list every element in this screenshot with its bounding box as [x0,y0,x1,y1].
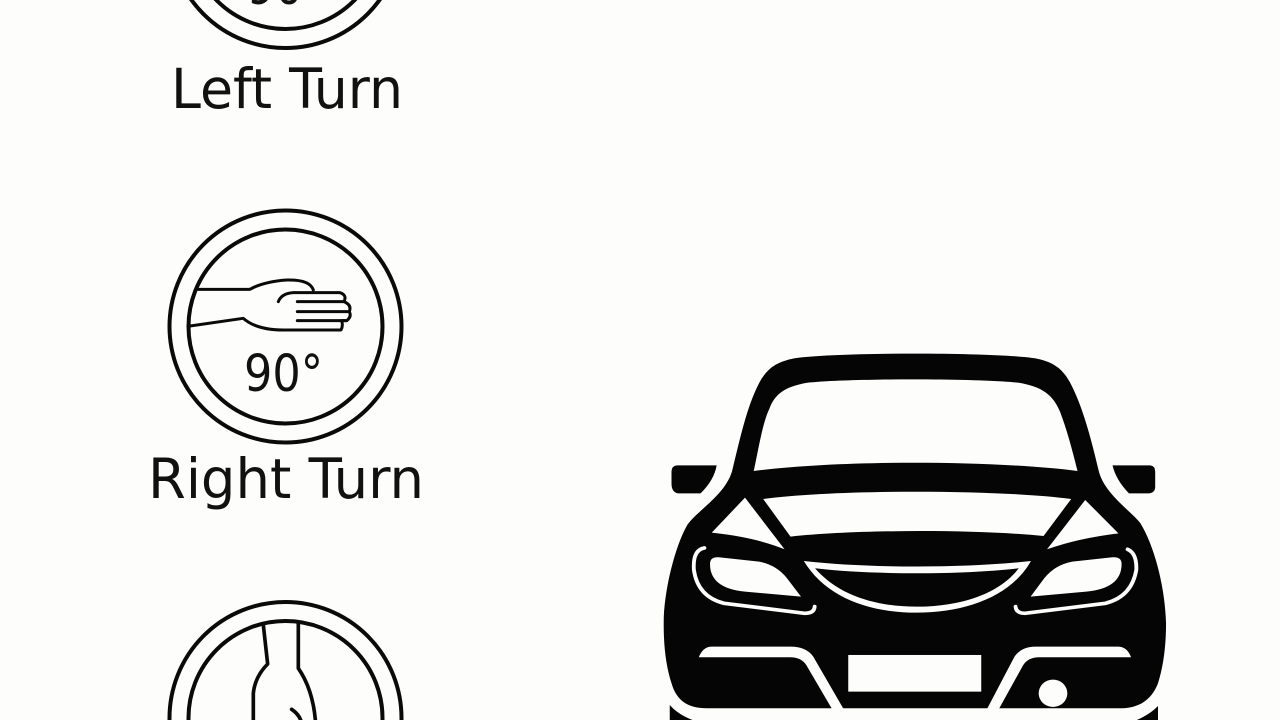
left mirror [672,465,717,493]
lower bumper [670,705,1158,720]
car body [664,354,1166,708]
icon: stop signal [170,602,402,720]
plate [848,655,981,692]
label: left turn: Left Turn [171,57,403,121]
turn indicators [712,498,1118,549]
right mirror [1112,465,1155,493]
icon: car front view [664,354,1166,720]
bumper trim [699,647,1131,709]
headlights [710,557,1122,597]
headlight trim [694,548,1136,613]
icon: left turn signal [170,0,402,48]
label: right turn: Right Turn [148,447,424,511]
icon: right turn signal: 90° [244,345,323,404]
fog lamp [1039,680,1067,707]
grille [804,561,1031,613]
icon: right turn signal [170,210,402,442]
hood [763,492,1071,537]
windshield [754,379,1078,471]
